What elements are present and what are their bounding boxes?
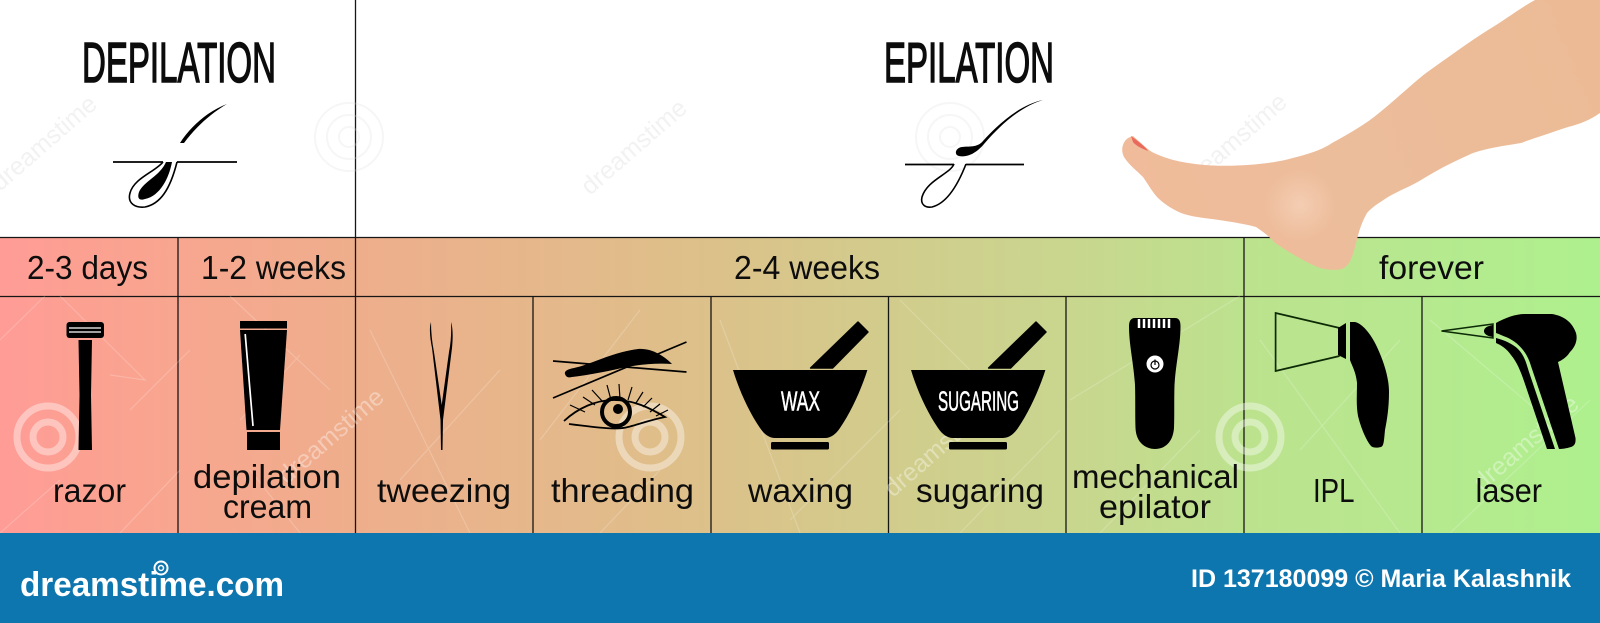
label: razor: razor xyxy=(53,472,126,509)
label: IPL: IPL xyxy=(1313,472,1354,509)
icon: wax mortar and pestle xyxy=(733,322,868,450)
icon: mechanical epilator xyxy=(1129,318,1180,449)
duration labels row xyxy=(27,249,1484,286)
label: sugaring: sugaring xyxy=(916,472,1044,509)
watermark spirals and wordmarks xyxy=(0,88,1584,503)
illustration: bare leg and foot xyxy=(1122,0,1600,270)
label: tweezing: tweezing xyxy=(377,472,511,509)
icon: threading of eyebrow over eye xyxy=(553,342,686,428)
heading: depilation: DEPILATION xyxy=(82,31,276,95)
watermark spirals and wordmarks: dreamstime xyxy=(1176,88,1292,195)
icon: hair pulled out with root xyxy=(905,100,1043,207)
icon: wax mortar and pestle: WAX xyxy=(781,386,820,416)
footer logo: dreamstime.com: dreamstime.com xyxy=(20,566,284,604)
icon: hair cut at skin surface xyxy=(113,104,237,207)
icon: tweezers xyxy=(430,322,453,450)
label: laser: laser xyxy=(1476,472,1542,509)
icon: laser device with beam xyxy=(1442,314,1577,449)
watermark spirals and wordmarks: dreamstime xyxy=(879,396,995,503)
label: threading: threading xyxy=(551,472,694,509)
label: depilation cream: cream xyxy=(223,488,312,525)
icon: sugaring mortar and pestle xyxy=(911,322,1046,450)
label: mechanical epilator xyxy=(1072,458,1239,525)
icon: sugaring mortar and pestle: SUGARING xyxy=(938,386,1019,416)
icon: IPL device with light beam xyxy=(1276,313,1389,448)
label: mechanical epilator: epilator xyxy=(1099,488,1211,525)
heading: epilation: EPILATION xyxy=(884,31,1054,95)
watermark spirals and wordmarks: dreamstime xyxy=(273,383,389,490)
label: depilation cream xyxy=(193,458,341,525)
icon: depilation cream tube xyxy=(240,321,287,450)
label: waxing: waxing xyxy=(747,472,853,509)
watermark spirals and wordmarks: dreamstime xyxy=(1468,390,1584,497)
watermark spirals and wordmarks: dreamstime xyxy=(576,94,692,201)
watermark pattern xyxy=(0,296,1590,533)
label: 1-2 weeks: 1-2 weeks xyxy=(201,249,346,286)
label: depilation cream: depilation xyxy=(193,458,341,495)
footer band xyxy=(0,533,1600,623)
label: 2-3 days: 2-3 days xyxy=(27,249,148,286)
footer credit: ID 137180099 © Maria Kalashnik xyxy=(1191,565,1571,593)
icon: razor xyxy=(66,322,104,450)
label: mechanical epilator: mechanical xyxy=(1072,458,1239,495)
label: 2-4 weeks: 2-4 weeks xyxy=(734,249,880,286)
label: forever: forever xyxy=(1379,249,1484,286)
